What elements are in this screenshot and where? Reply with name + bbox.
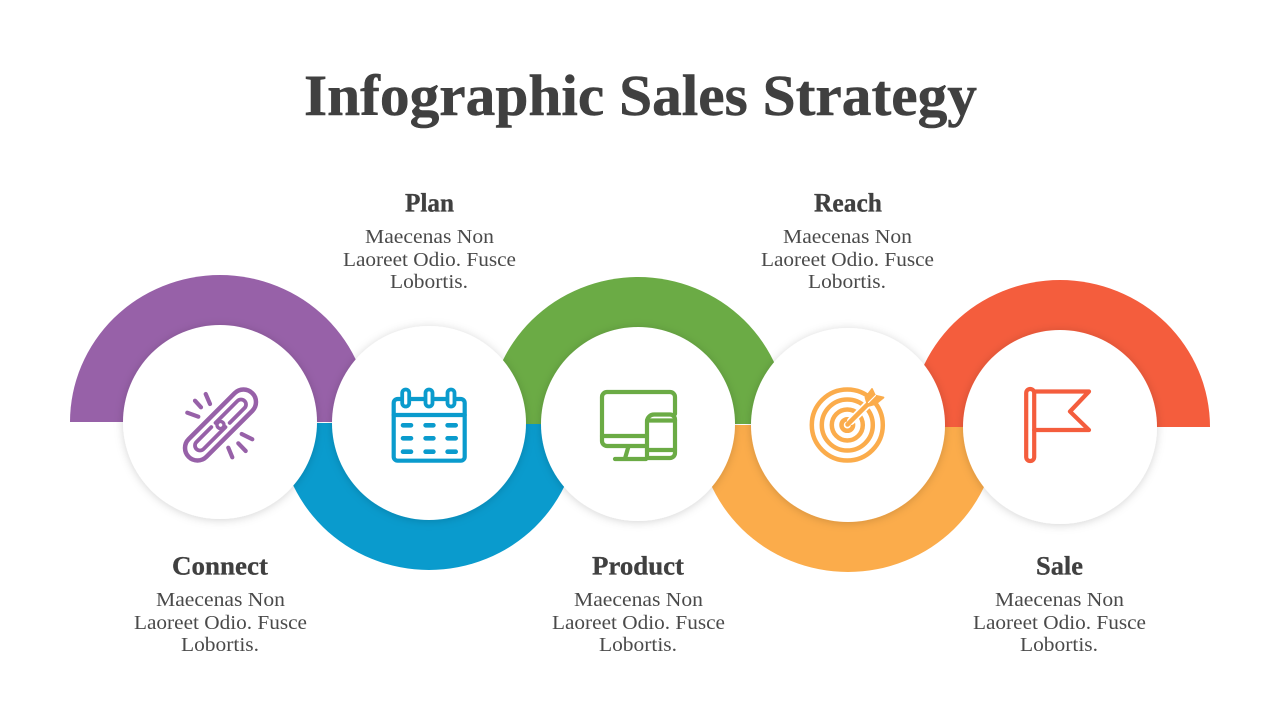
text: reach: Laoreet Odio. Fusce xyxy=(761,249,934,271)
text: product: Product xyxy=(592,552,684,580)
text: connect: Lobortis. xyxy=(181,634,259,656)
text: sale: Maecenas Non xyxy=(995,589,1124,611)
icon: flag xyxy=(1026,389,1089,461)
text: sale: Lobortis. xyxy=(1020,634,1098,656)
text: reach: Lobortis. xyxy=(808,271,886,293)
text: plan: Plan xyxy=(405,188,455,218)
text: product: Maecenas Non xyxy=(574,589,703,611)
text: connect xyxy=(134,552,307,656)
arc: orange xyxy=(698,425,998,572)
circle: plan xyxy=(332,326,526,520)
text: sale xyxy=(973,552,1146,656)
circle: reach xyxy=(751,328,945,522)
icon: chain link xyxy=(180,384,261,466)
text: plan xyxy=(343,188,516,293)
text: connect: Laoreet Odio. Fusce xyxy=(134,612,307,634)
text: sale: Laoreet Odio. Fusce xyxy=(973,612,1146,634)
text: sale: Sale xyxy=(1036,552,1083,580)
text: product: Lobortis. xyxy=(599,634,677,656)
arc: purple xyxy=(70,275,370,422)
text: reach xyxy=(761,188,934,293)
arc: blue xyxy=(279,423,579,570)
arc: green xyxy=(488,277,788,424)
icon: devices xyxy=(602,392,675,459)
text: plan: Maecenas Non xyxy=(365,226,494,248)
text: product: Laoreet Odio. Fusce xyxy=(552,612,725,634)
circle: sale xyxy=(963,330,1157,524)
text: plan: Laoreet Odio. Fusce xyxy=(343,249,516,271)
arc: red xyxy=(910,280,1210,427)
circle: product xyxy=(541,327,735,521)
text: connect: Maecenas Non xyxy=(156,589,285,611)
text: product xyxy=(552,552,725,656)
text: plan: Lobortis. xyxy=(390,271,468,293)
text: reach: Maecenas Non xyxy=(783,226,912,248)
icon: target xyxy=(812,389,884,460)
text: connect: Connect xyxy=(172,552,268,580)
title: Infographic Sales Strategy xyxy=(304,63,977,128)
text: reach: Reach xyxy=(814,188,883,218)
icon: calendar xyxy=(394,390,465,461)
circle: connect xyxy=(123,325,317,519)
